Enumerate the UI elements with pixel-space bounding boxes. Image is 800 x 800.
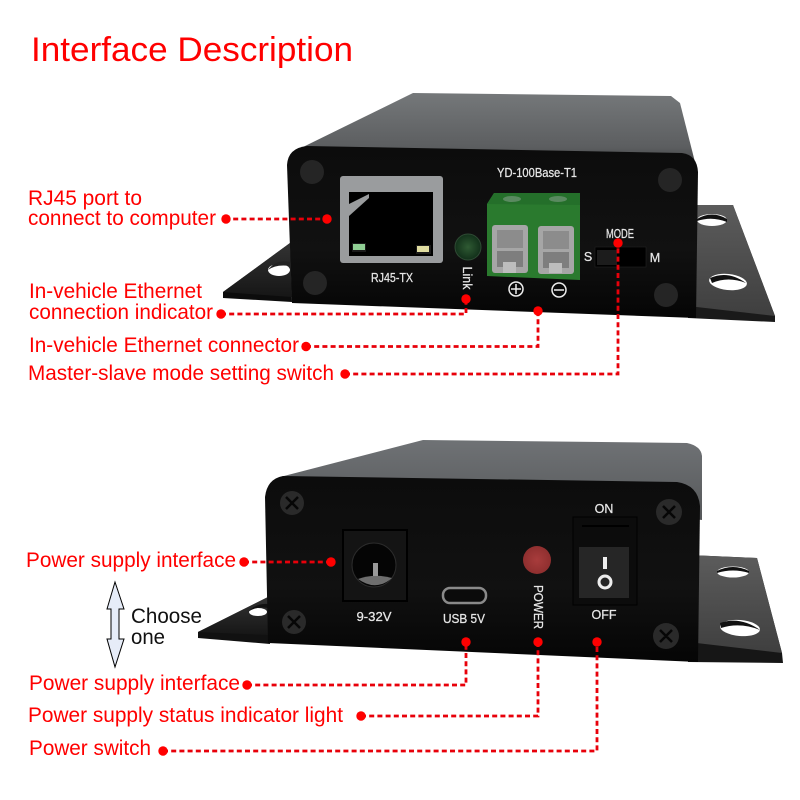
OFF label: OFF <box>592 608 617 622</box>
choose one note: Choose <box>131 605 202 628</box>
callout: power switch <box>29 637 602 760</box>
callout: connection indicator <box>29 280 471 324</box>
front face <box>287 146 698 318</box>
mode labels <box>584 227 660 265</box>
callout: power switch: Power switch <box>29 737 151 760</box>
choose one note: one <box>131 626 165 649</box>
screws <box>280 491 682 649</box>
callout: power status light: Power supply status indicator light <box>28 704 343 727</box>
callout: DC power interface <box>26 549 336 572</box>
callout: Ethernet connector <box>29 306 543 357</box>
link LED <box>455 234 481 260</box>
right mounting flange <box>688 555 783 663</box>
micro USB port <box>443 588 486 603</box>
screws <box>300 160 682 307</box>
choose one note <box>131 605 202 649</box>
callout: connection indicator: In-vehicle Ethernet <box>29 280 202 303</box>
left mounting flange <box>198 597 270 644</box>
callout: RJ45 port <box>28 187 332 230</box>
callout: Ethernet connector: In-vehicle Ethernet connector <box>29 334 299 357</box>
callout: USB power interface: Power supply interface <box>29 672 240 695</box>
callout: DC power interface: Power supply interface <box>26 549 236 572</box>
RJ45 port <box>340 176 443 263</box>
mode labels: S <box>584 250 592 264</box>
USB label: USB 5V <box>443 612 486 626</box>
model label: YD-100Base-T1 <box>497 166 577 180</box>
callout: USB power interface <box>29 637 471 695</box>
mode switch <box>595 247 646 267</box>
voltage label: 9-32V <box>356 610 392 624</box>
callout: mode switch: Master-slave mode setting switch <box>28 362 334 385</box>
device: front panel view <box>223 93 775 322</box>
callout: RJ45 port: connect to computer <box>28 207 216 230</box>
right mounting flange <box>688 205 775 322</box>
green terminal connector <box>487 193 580 280</box>
power LED <box>523 546 551 574</box>
callout: mode switch <box>28 238 623 385</box>
title: Interface Description <box>31 31 353 69</box>
mode labels: M <box>650 251 660 265</box>
ON label: ON <box>595 502 613 516</box>
mode labels: MODE <box>606 227 634 241</box>
enclosure top <box>280 440 702 520</box>
device: rear panel view <box>198 440 783 663</box>
power label: POWER <box>531 585 545 629</box>
callout: RJ45 port: RJ45 port to <box>28 187 142 210</box>
DC power jack <box>343 530 407 601</box>
plus and minus symbols <box>509 282 566 297</box>
rear face <box>265 476 700 662</box>
left mounting flange <box>223 243 292 302</box>
double arrow <box>107 582 124 667</box>
rocker switch <box>573 517 637 605</box>
RJ45 label: RJ45-TX <box>371 271 414 285</box>
callout: power status light <box>28 637 543 727</box>
callout: connection indicator: connection indicator <box>29 301 213 324</box>
link label: Link <box>460 267 474 290</box>
enclosure top <box>303 93 697 170</box>
